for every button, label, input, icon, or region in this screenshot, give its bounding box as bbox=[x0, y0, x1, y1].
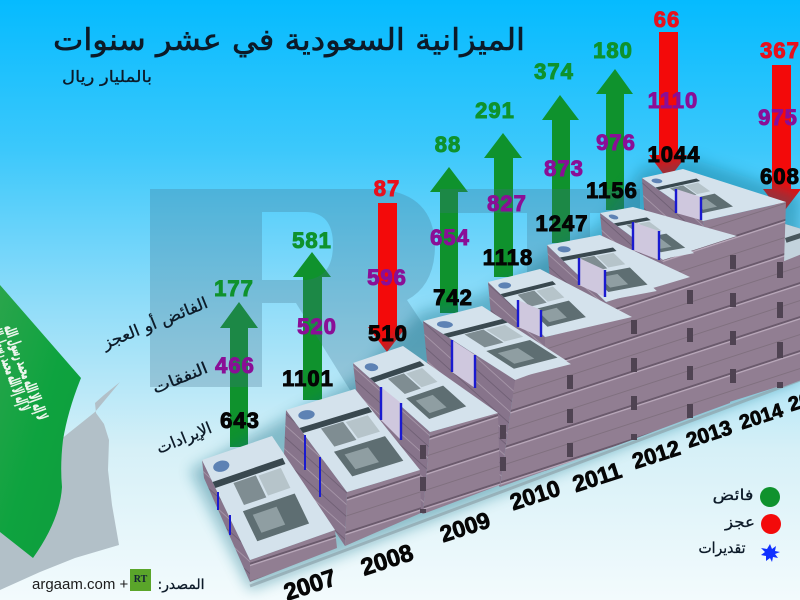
values 2013: 1156 bbox=[586, 178, 638, 203]
values 2009: 510 bbox=[368, 321, 408, 346]
values 2012: 374 bbox=[534, 59, 574, 84]
values 2007: 177 bbox=[214, 276, 254, 301]
values 2013 bbox=[586, 38, 638, 203]
values 2009 bbox=[367, 176, 408, 346]
subtitle: بالمليار ريال bbox=[62, 67, 152, 87]
arrow: surplus 2010 bbox=[430, 167, 468, 313]
source line: RT bbox=[134, 574, 148, 585]
money stack: 2011 bbox=[488, 269, 634, 471]
year axis labels: 2013 bbox=[683, 416, 735, 453]
legend bbox=[698, 486, 781, 562]
year axis labels: 2008 bbox=[358, 539, 417, 582]
legend: تقديرات bbox=[698, 539, 746, 557]
values 2009: 596 bbox=[367, 265, 407, 290]
values 2007: 643 bbox=[220, 408, 260, 433]
money stack: 2014 bbox=[642, 169, 786, 405]
values 2011 bbox=[475, 98, 533, 270]
values 2013: 180 bbox=[593, 38, 633, 63]
title: الميزانية السعودية في عشر سنوات bbox=[53, 23, 525, 58]
values 2010: 654 bbox=[430, 225, 470, 250]
year axis labels: 2011 bbox=[569, 457, 625, 497]
legend: فائض bbox=[712, 486, 754, 504]
values 2008 bbox=[282, 228, 337, 391]
flag of Saudi Arabia: لا إله إلا الله محمد رسول الله bbox=[0, 322, 51, 422]
values 2012: 873 bbox=[544, 156, 584, 181]
values 2009: 87 bbox=[374, 176, 400, 201]
values 2010: 88 bbox=[435, 132, 461, 157]
shadow behind stacks bbox=[190, 158, 800, 590]
values 2011: 1118 bbox=[483, 245, 533, 270]
values 2015: 975 bbox=[758, 105, 798, 130]
values 2012 bbox=[534, 59, 588, 236]
arrow: surplus 2013 bbox=[596, 69, 633, 210]
values 2008: 581 bbox=[292, 228, 332, 253]
arrow: surplus 2011 bbox=[484, 133, 522, 277]
year axis labels: 2009 bbox=[437, 507, 493, 547]
year axis labels: 2014 bbox=[737, 399, 787, 434]
silhouette: Saudi map bbox=[0, 382, 120, 590]
money stack: 2009 bbox=[353, 346, 503, 514]
arrow: surplus 2012 bbox=[542, 95, 579, 243]
source line bbox=[32, 569, 204, 593]
values 2008: 1101 bbox=[282, 366, 334, 391]
money stack: 2010 bbox=[423, 306, 572, 487]
money stack: 2012 bbox=[547, 235, 690, 448]
year axis labels: 2010 bbox=[507, 475, 563, 515]
arrow: deficit 2009 bbox=[368, 203, 406, 352]
values 2007: 466 bbox=[215, 353, 255, 378]
values 2012: 1247 bbox=[536, 211, 588, 236]
values 2008: 520 bbox=[297, 314, 337, 339]
values 2011: 827 bbox=[487, 191, 527, 216]
floor line under stacks bbox=[250, 380, 800, 586]
year axis labels: 2012 bbox=[629, 435, 683, 474]
values 2015: 367 bbox=[760, 38, 800, 63]
values 2010 bbox=[430, 132, 473, 310]
row label: expenditure: النفقات bbox=[149, 358, 210, 398]
row label: surplus or deficit: الفائض أو العجز bbox=[98, 292, 211, 354]
money stack: 2008 bbox=[284, 389, 423, 546]
legend: عجز bbox=[724, 513, 755, 531]
values 2010: 742 bbox=[433, 285, 473, 310]
values 2014: 1044 bbox=[648, 142, 700, 167]
money stack: 2015 bbox=[780, 224, 800, 388]
arrow: deficit 2014 bbox=[649, 32, 687, 180]
values 2014: 1110 bbox=[648, 88, 698, 113]
arrow: deficit 2015 bbox=[763, 65, 800, 214]
source line: المصدر: bbox=[158, 577, 204, 593]
row label: revenue: الإيرادات bbox=[153, 418, 215, 458]
values 2011: 291 bbox=[475, 98, 515, 123]
money stack: 2007 bbox=[202, 436, 337, 582]
values 2015: 608 bbox=[760, 164, 800, 189]
values 2014 bbox=[648, 7, 700, 167]
money stack: 2013 bbox=[600, 207, 737, 425]
values 2013: 976 bbox=[596, 130, 636, 155]
year axis labels bbox=[281, 382, 800, 600]
source line: argaam.com + bbox=[32, 576, 129, 593]
values 2015 bbox=[758, 38, 800, 189]
values 2014: 66 bbox=[654, 7, 680, 32]
arrow: surplus 2007 bbox=[220, 302, 258, 447]
values 2007 bbox=[214, 276, 260, 433]
RT watermark bbox=[150, 189, 640, 395]
arrow: surplus 2008 bbox=[293, 252, 331, 400]
